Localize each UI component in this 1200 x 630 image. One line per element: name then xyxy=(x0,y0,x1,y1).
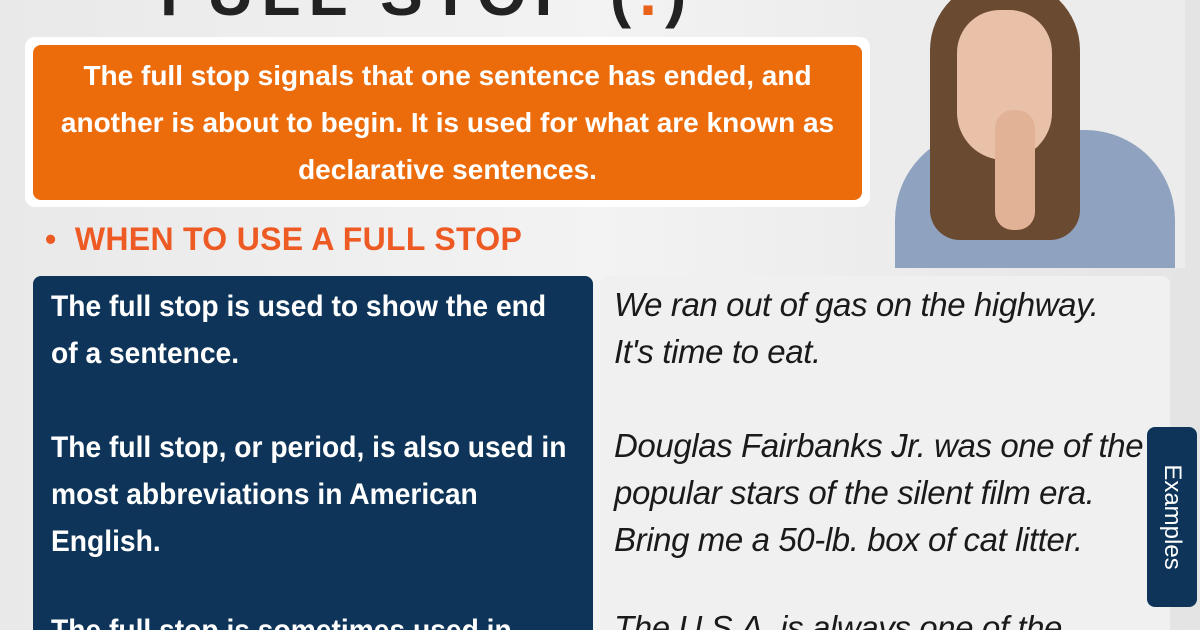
example 1: We ran out of gas on the highway. xyxy=(614,286,1099,323)
tab: examples xyxy=(1147,427,1197,607)
rule 1 xyxy=(51,290,546,370)
rule 2 xyxy=(51,431,567,558)
rule 2: most abbreviations in American xyxy=(51,478,478,511)
photo: thinking woman xyxy=(875,0,1185,268)
panel: examples xyxy=(600,276,1170,630)
rule 1: The full stop is used to show the end xyxy=(51,290,546,323)
rule 1: of a sentence. xyxy=(51,337,239,370)
rule 2: The full stop, or period, is also used in xyxy=(51,431,567,464)
example 2: Douglas Fairbanks Jr. was one of the xyxy=(614,427,1143,464)
example 2: Bring me a 50-lb. box of cat litter. xyxy=(614,521,1083,558)
panel: definition xyxy=(25,37,870,207)
tab: examples: Examples xyxy=(1159,464,1186,570)
panel: rules xyxy=(33,276,593,630)
example 1: It's time to eat. xyxy=(614,333,821,370)
rule 2: English. xyxy=(51,525,161,558)
panel: definition: The full stop signals that one sentence has ended, and xyxy=(83,60,812,91)
panel: definition: another is about to begin. It is used for what are known as xyxy=(61,107,834,138)
example 1 xyxy=(614,286,1099,370)
panel: definition: declarative sentences. xyxy=(298,154,597,185)
example 2: popular stars of the silent film era. xyxy=(614,474,1094,511)
heading: when to use: • WHEN TO USE A FULL STOP xyxy=(45,221,522,257)
example 2 xyxy=(613,427,1143,558)
